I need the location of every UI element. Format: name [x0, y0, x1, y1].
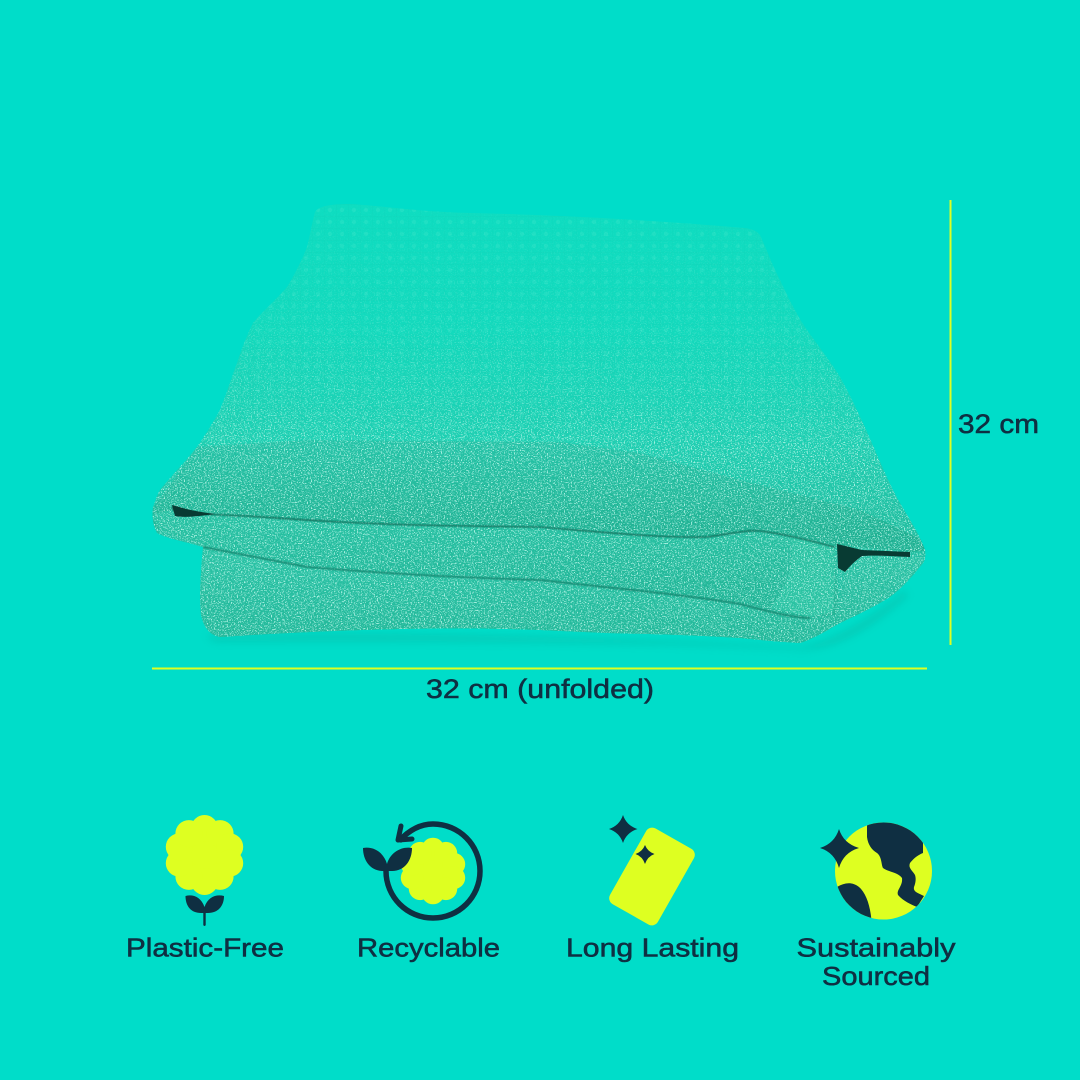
- feature: long lasting: [566, 815, 739, 962]
- rolled end: [770, 535, 835, 617]
- towel drop shadow: [205, 590, 908, 650]
- icon: recycle loop with flower and leaves: [363, 824, 480, 918]
- crease lines: [172, 507, 835, 547]
- bottom fold: [200, 546, 924, 643]
- dark gap in fold: [837, 544, 910, 572]
- dimension label: width: 32 cm (unfolded): [426, 674, 654, 704]
- feature: plastic-free: [126, 815, 284, 962]
- top fold front face: [145, 440, 935, 552]
- dimension line: width: [152, 668, 927, 670]
- dimension line: height: [950, 200, 952, 645]
- label: Long Lasting: Long Lasting: [566, 932, 739, 962]
- feature: sustainably sourced: [798, 822, 956, 986]
- dimension label: height: 32 cm: [958, 409, 1039, 439]
- icon: globe with sparkle: [820, 822, 932, 920]
- label: Sustainably Sourced: Sourced: [822, 961, 930, 991]
- middle fold: [150, 510, 840, 620]
- label: Recyclable: Recyclable: [357, 932, 500, 962]
- icon: cotton flower with sprout: [166, 815, 243, 926]
- icon: tilted card with sparkles: [607, 815, 697, 928]
- towel fabric body: [140, 195, 940, 655]
- label: Plastic-Free: Plastic-Free: [126, 932, 284, 962]
- label: Sustainably Sourced: Sustainably: [796, 932, 956, 962]
- fabric speckle: [152, 220, 926, 643]
- feature: recyclable: [357, 824, 500, 962]
- photo: folded green towel: [140, 195, 940, 655]
